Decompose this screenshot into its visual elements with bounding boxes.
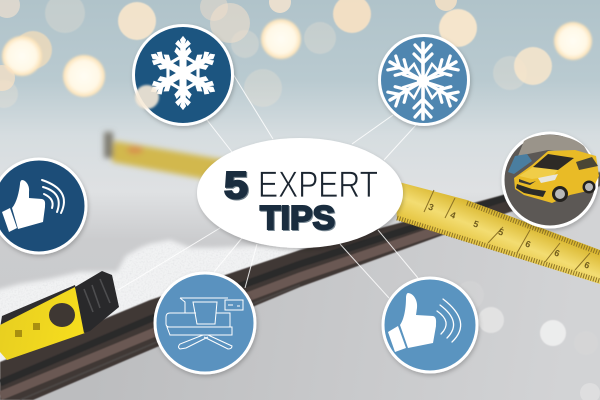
center title ellipse <box>197 138 403 248</box>
measuring tape: 6 <box>524 239 532 250</box>
measuring tape: 5 <box>472 219 480 230</box>
title text: 5 <box>225 166 249 208</box>
title text <box>224 164 378 237</box>
metal car hood <box>0 175 600 400</box>
measuring tape: 6 <box>553 248 561 259</box>
measuring tape <box>395 181 600 284</box>
icon: light snowflake circle <box>380 36 468 124</box>
measuring tape: 3 <box>427 202 435 213</box>
blurred tape end <box>104 132 225 180</box>
wiper yellow clip <box>0 285 85 360</box>
title text: TIPS <box>260 199 335 236</box>
wiper blade <box>0 172 600 400</box>
title text: TIPS <box>261 200 336 237</box>
title text: EXPERT <box>258 164 378 205</box>
sound waves <box>437 299 461 342</box>
photo: yellow car circle <box>503 133 599 227</box>
connector lines <box>118 74 418 298</box>
measuring tape: 4 <box>449 210 457 221</box>
measuring tape: 5 <box>497 227 505 238</box>
sound waves <box>42 180 64 213</box>
clip hole <box>49 303 75 327</box>
wiper black connector <box>75 271 119 333</box>
measuring tape: 6 <box>583 260 591 271</box>
icon: dark thumbs up circle <box>0 159 86 253</box>
snow pile <box>0 240 300 385</box>
icon: light thumbs up circle <box>383 278 477 372</box>
icon: wiper mount diagram circle <box>155 273 255 373</box>
title text: 5 <box>224 165 248 207</box>
icon: dark snowflake circle <box>134 26 232 124</box>
car body <box>514 150 599 203</box>
